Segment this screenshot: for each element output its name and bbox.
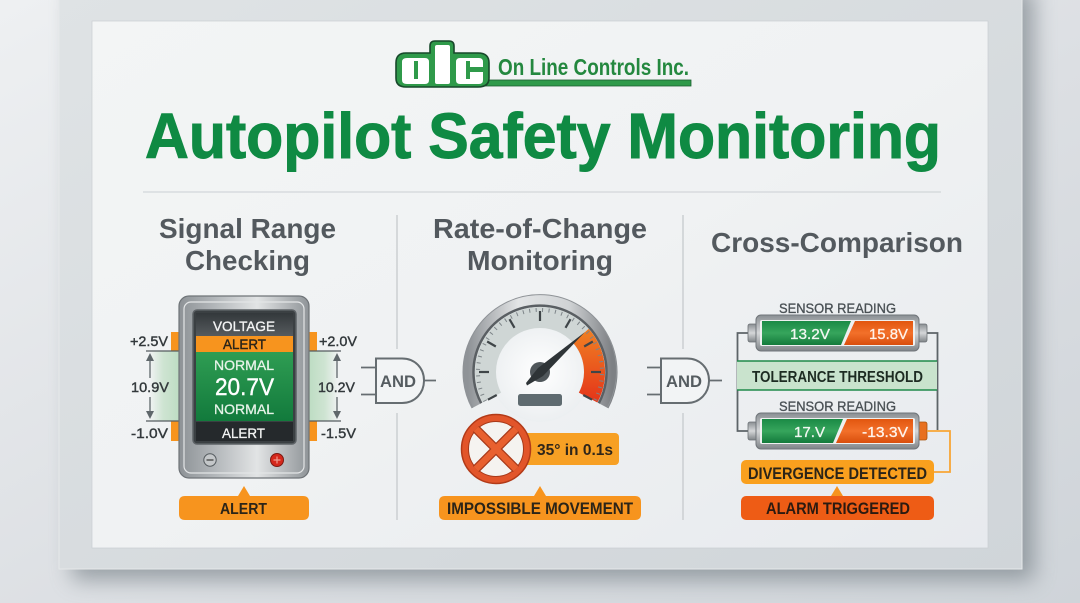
voltage labels: -1.0V bbox=[131, 425, 169, 441]
rate tag: 35° in 0.1s bbox=[537, 442, 613, 459]
voltage meter device: NORMAL bbox=[214, 401, 274, 417]
heading: rate-of-change monitoring: Monitoring bbox=[467, 245, 613, 276]
AND gate 1 bbox=[361, 358, 436, 403]
sensor battery 2 bbox=[748, 413, 927, 449]
gauge dial face bbox=[485, 317, 594, 398]
alarm triggered callout: ALARM TRIGGERED bbox=[766, 499, 910, 518]
voltage labels bbox=[130, 333, 358, 441]
tolerance threshold band bbox=[737, 361, 937, 390]
divergence detected callout: DIVERGENCE DETECTED bbox=[748, 464, 927, 483]
alarm triggered callout bbox=[741, 496, 934, 520]
plus button bbox=[270, 454, 284, 466]
meter lower alert bbox=[196, 422, 293, 441]
panel: cross-comparison bbox=[711, 227, 963, 520]
sensor battery 1: 15.8V bbox=[869, 326, 908, 343]
divergence detected callout bbox=[741, 460, 934, 484]
logo letter l bbox=[435, 45, 450, 84]
sensor reading label 1: SENSOR READING bbox=[779, 300, 896, 316]
voltage labels: 10.9V bbox=[131, 379, 170, 395]
logo silhouette bbox=[396, 41, 489, 87]
gauge needle bbox=[526, 332, 585, 386]
gauge red zone bbox=[581, 336, 595, 398]
logo wordmark: On Line Controls Inc. bbox=[498, 54, 689, 80]
sensor reading label 2: SENSOR READING bbox=[779, 398, 896, 414]
sensor battery 2: 17.V bbox=[794, 424, 825, 441]
panel: signal range checking bbox=[130, 213, 358, 520]
heading: signal range checking: Signal Range bbox=[159, 213, 336, 244]
minus button bbox=[204, 454, 216, 466]
logo: On Line Controls Inc. bbox=[396, 41, 691, 87]
alert callout: ALERT bbox=[220, 501, 267, 518]
AND gate 2: AND bbox=[666, 372, 702, 391]
logo letter o bbox=[402, 58, 429, 84]
sensor battery 2: -13.3V bbox=[862, 424, 908, 441]
rate tag bbox=[522, 433, 619, 465]
caret bbox=[831, 486, 843, 496]
heading: rate-of-change monitoring: Rate-of-Change bbox=[433, 213, 647, 244]
AND gate 1: AND bbox=[380, 372, 416, 391]
meter header bbox=[196, 313, 293, 336]
heading: signal range checking bbox=[159, 213, 336, 276]
heading: cross-comparison: Cross-Comparison bbox=[711, 227, 963, 258]
impossible movement callout: IMPOSSIBLE MOVEMENT bbox=[447, 499, 634, 518]
gauge minor ticks bbox=[478, 310, 602, 401]
left range band bbox=[146, 332, 180, 441]
heading: rate-of-change monitoring bbox=[433, 213, 647, 276]
impossible movement callout bbox=[439, 486, 641, 520]
divergence connector bbox=[927, 431, 950, 472]
wiring bbox=[738, 333, 938, 431]
voltage labels: +2.0V bbox=[319, 333, 358, 349]
gauge readout bbox=[518, 394, 562, 406]
voltage meter device: ALERT bbox=[222, 425, 265, 441]
voltage meter device: VOLTAGE bbox=[213, 318, 275, 334]
logo underline bbox=[484, 80, 691, 86]
voltage labels: -1.5V bbox=[321, 425, 357, 441]
voltage meter device: ALERT bbox=[223, 336, 266, 352]
voltage labels: +2.5V bbox=[130, 333, 169, 349]
speedometer gauge bbox=[464, 295, 616, 422]
heading: signal range checking: Checking bbox=[185, 245, 310, 276]
tolerance threshold band: TOLERANCE THRESHOLD bbox=[752, 369, 923, 386]
sensor battery 1: 13.2V bbox=[790, 326, 830, 343]
panel: rate-of-change monitoring bbox=[433, 213, 647, 520]
gauge major ticks bbox=[479, 311, 601, 400]
meter normal band bbox=[196, 352, 293, 421]
voltage meter device bbox=[179, 296, 309, 478]
gauge hub bbox=[530, 362, 550, 382]
voltage meter device: 20.7V bbox=[215, 374, 274, 401]
alert callout bbox=[179, 486, 309, 520]
right range band bbox=[308, 332, 341, 441]
AND gate 2 bbox=[647, 358, 722, 403]
title: Autopilot Safety Monitoring bbox=[145, 100, 941, 172]
voltage meter device: NORMAL bbox=[214, 357, 274, 373]
logo letter c bbox=[456, 58, 483, 84]
sensor battery 1 bbox=[748, 315, 927, 351]
inner panel bbox=[92, 21, 988, 548]
prohibition icon bbox=[462, 414, 530, 484]
meter upper alert bbox=[196, 336, 293, 352]
voltage labels: 10.2V bbox=[318, 379, 356, 395]
gauge bezel bbox=[468, 300, 612, 406]
